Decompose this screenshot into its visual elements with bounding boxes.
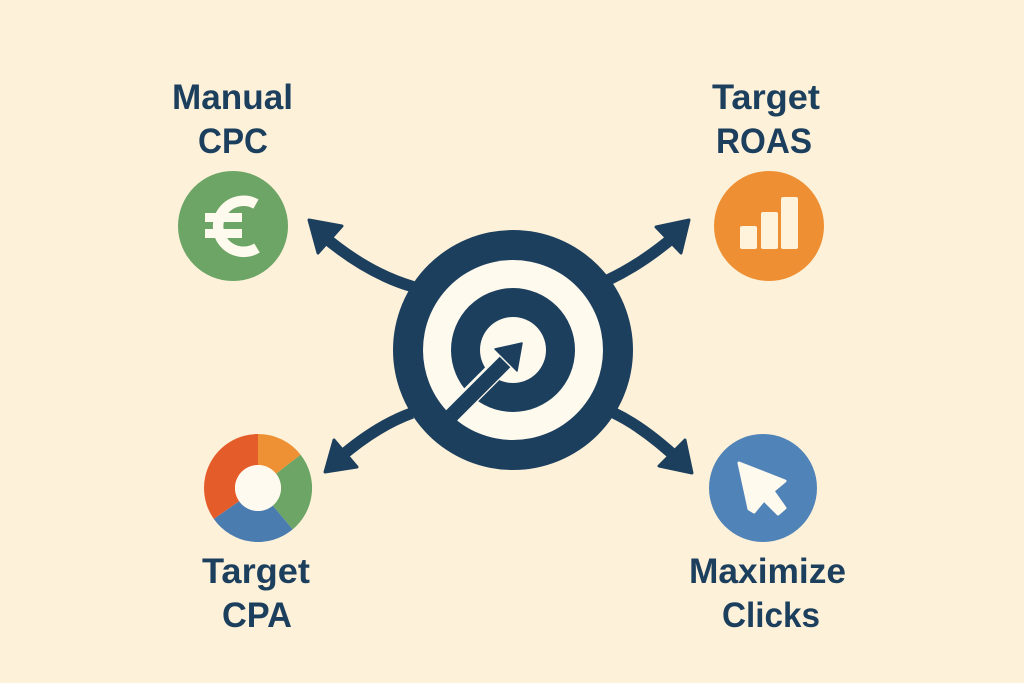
label: Maximize Clicks: Clicks — [722, 596, 820, 635]
icon: donut chart — [204, 434, 312, 542]
label: Target CPA: Target — [202, 552, 310, 591]
icon: cursor on blue circle — [709, 434, 817, 542]
icon: euro on green circle — [178, 171, 288, 281]
label: Target ROAS — [712, 78, 820, 161]
central arrow — [445, 343, 522, 422]
label: Maximize Clicks: Maximize — [689, 552, 846, 591]
arrow: to Target CPA — [325, 413, 412, 472]
label: Target CPA: CPA — [222, 596, 292, 635]
label: Maximize Clicks — [689, 552, 846, 635]
icon: bar chart on orange circle — [714, 171, 824, 281]
label: Target CPA — [202, 552, 310, 635]
label: Manual CPC: CPC — [198, 122, 268, 161]
arrow: to Manual CPC — [309, 220, 414, 287]
arrow: to Target ROAS — [608, 220, 689, 280]
central target icon — [393, 230, 633, 470]
label: Target ROAS: Target — [712, 78, 820, 117]
label: Manual CPC — [172, 78, 293, 161]
label: Manual CPC: Manual — [172, 78, 293, 117]
label: Target ROAS: ROAS — [716, 122, 812, 161]
arrow: to Maximize Clicks — [614, 413, 692, 473]
